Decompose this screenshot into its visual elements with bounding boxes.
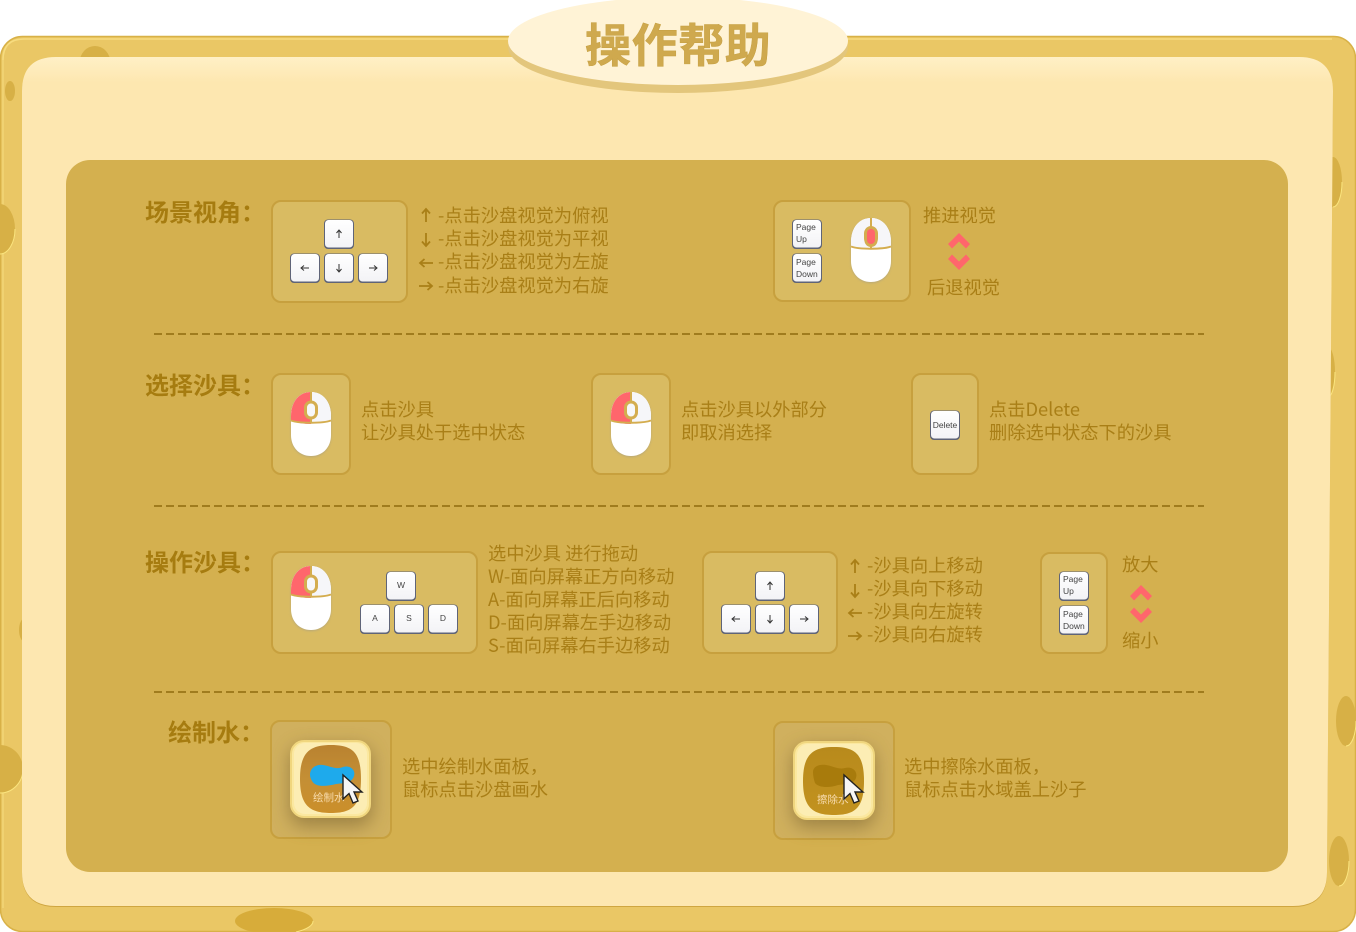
text: delete: 删除选中状态下的沙具: [989, 419, 1172, 445]
text: scale: [1122, 551, 1158, 653]
text: draw water: 鼠标点击沙盘画水: [402, 776, 548, 802]
panel: page keys and mouse wheel: Page: [796, 222, 816, 232]
arrow key descriptions: [419, 202, 609, 298]
arrow key descriptions: -点击沙盘视觉为俯视: [438, 202, 609, 228]
panel: page keys scale: Page: [1063, 609, 1083, 619]
text: click deselect: 即取消选择: [681, 419, 772, 445]
text: draw water: 选中绘制水面板，: [402, 753, 548, 779]
panel: page keys scale: Down: [1063, 621, 1085, 631]
text: WASD: 选中沙具 进行拖动: [488, 540, 638, 566]
panel: erase water icon: [774, 722, 894, 839]
panel: page keys and mouse wheel: [774, 201, 910, 301]
text: click select: 点击沙具: [361, 396, 434, 422]
panel: erase water icon: 擦除水: [817, 792, 849, 807]
text: delete: [989, 396, 1172, 445]
text: click select: [361, 396, 525, 445]
panel: mouse and WASD: W: [397, 580, 405, 590]
panel: page keys and mouse wheel: Page: [796, 257, 816, 267]
panel: draw water icon: 绘制水: [313, 790, 345, 805]
text: delete: 点击Delete: [989, 396, 1080, 422]
panel: mouse and WASD: D: [440, 613, 446, 623]
panel: mouse and WASD: A: [372, 613, 378, 623]
text: click select: 让沙具处于选中状态: [361, 419, 525, 445]
arrow key descriptions: -点击沙盘视觉为右旋: [438, 272, 609, 298]
text: WASD: A-面向屏幕正后向移动: [488, 586, 670, 612]
panel: delete key: [912, 374, 978, 474]
panel: delete key: Delete: [933, 420, 958, 430]
panel: arrow keys: [272, 201, 407, 302]
section heading: select: 选择沙具：: [145, 366, 265, 401]
title badge: [508, 0, 848, 93]
text: click deselect: [681, 396, 827, 445]
text: arrow keys move: [848, 552, 983, 647]
panel: click select: [272, 374, 350, 474]
text: arrow keys move: -沙具向右旋转: [867, 621, 983, 647]
section heading: operate: 操作沙具：: [145, 543, 265, 578]
panel: page keys scale: Page: [1063, 574, 1083, 584]
text: scale: 放大: [1122, 551, 1158, 577]
panel: draw water icon: [271, 721, 391, 838]
panel: page keys scale: Up: [1063, 586, 1074, 596]
title: 操作帮助: [585, 10, 771, 76]
arrow key descriptions: -点击沙盘视觉为左旋: [438, 248, 609, 274]
panel: page keys and mouse wheel: Up: [796, 234, 807, 244]
panel: click deselect: [592, 374, 670, 474]
text: erase water: [904, 753, 1086, 802]
section heading: scene view: 场景视角：: [145, 193, 265, 228]
text: erase water: 选中擦除水面板，: [904, 753, 1050, 779]
text: erase water: 鼠标点击水域盖上沙子: [904, 776, 1086, 802]
panel: mouse and WASD: S: [406, 613, 412, 623]
text: arrow keys move: -沙具向上移动: [867, 552, 983, 578]
zoom view text: [923, 202, 1000, 300]
text: WASD: [488, 540, 674, 658]
zoom view text: 推进视觉: [923, 202, 996, 228]
text: click deselect: 点击沙具以外部分: [681, 396, 827, 422]
text: WASD: S-面向屏幕右手边移动: [488, 632, 670, 658]
panel: mouse and WASD: [272, 552, 477, 653]
text: arrow keys move: -沙具向左旋转: [867, 598, 983, 624]
panel: page keys scale: [1041, 553, 1107, 653]
section heading: draw water: 绘制水：: [168, 713, 264, 748]
text: WASD: W-面向屏幕正方向移动: [488, 563, 674, 589]
main panel: [66, 160, 1288, 872]
zoom view text: 后退视觉: [927, 274, 1000, 300]
panel: arrow keys move: [703, 552, 837, 653]
text: arrow keys move: -沙具向下移动: [867, 575, 983, 601]
text: draw water: [402, 753, 548, 802]
arrow key descriptions: -点击沙盘视觉为平视: [438, 225, 609, 251]
panel: page keys and mouse wheel: Down: [796, 269, 818, 279]
text: WASD: D-面向屏幕左手边移动: [488, 609, 671, 635]
text: scale: 缩小: [1122, 627, 1158, 653]
